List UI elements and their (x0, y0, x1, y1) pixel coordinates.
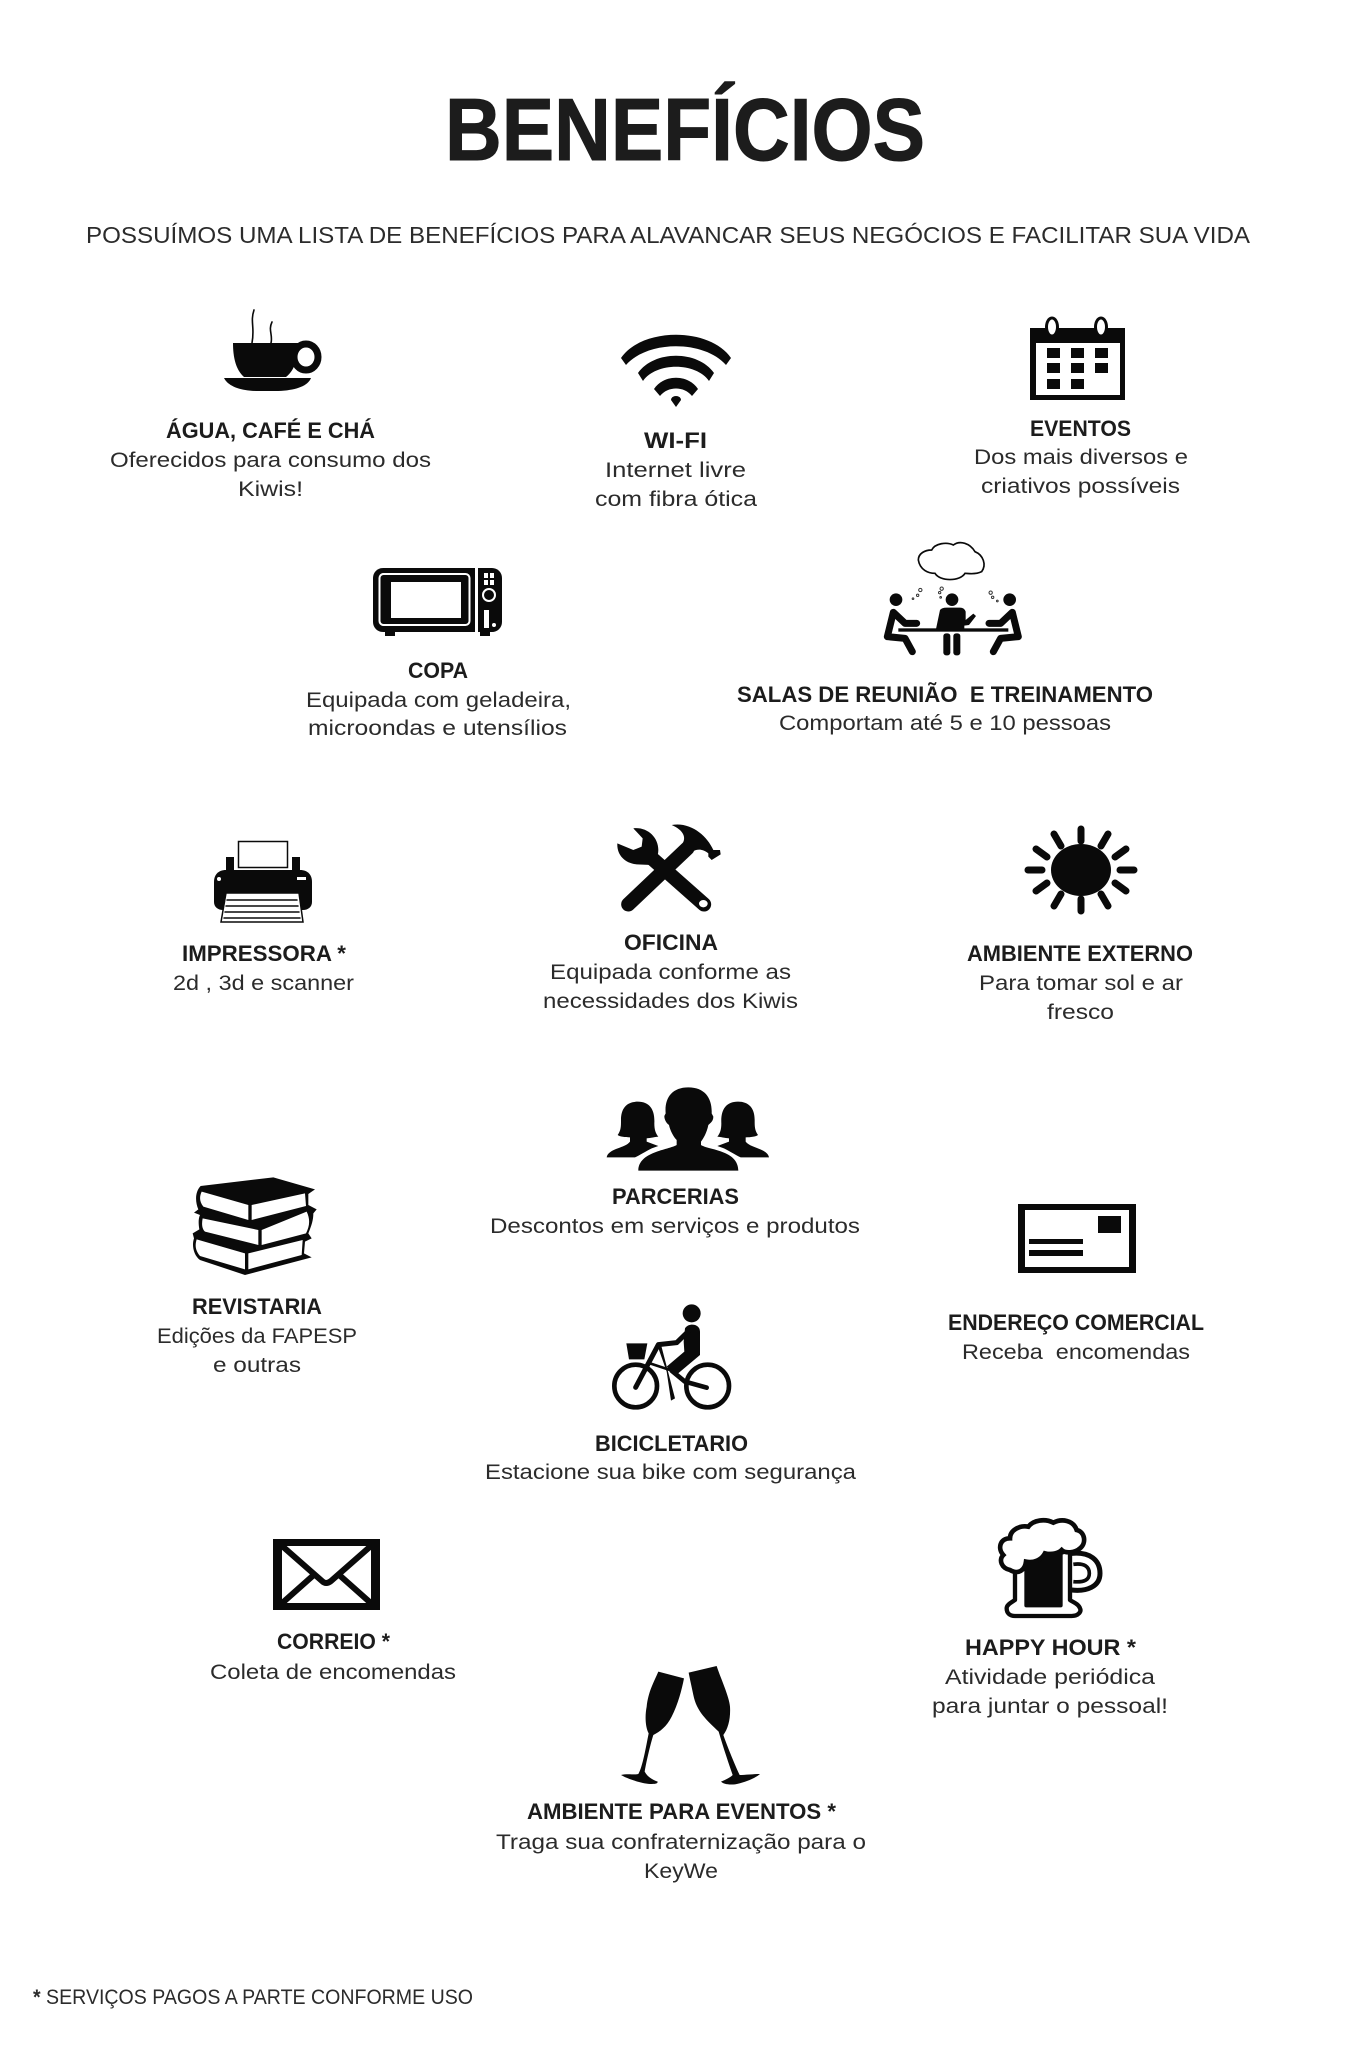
heading: HAPPY HOUR * (965, 1635, 1136, 1660)
description: Receba encomendas (962, 1340, 1190, 1364)
item: bicicletario (485, 1304, 856, 1484)
description line 1: Internet livre (605, 458, 746, 482)
icon: cyclist (614, 1304, 729, 1407)
item: ambiente externo (967, 829, 1193, 1024)
item: endereço comercial (948, 1204, 1204, 1364)
icon: beer mug (1000, 1520, 1100, 1616)
heading: REVISTARIA (192, 1294, 322, 1319)
description line 2: necessidades dos Kiwis (543, 989, 798, 1013)
description line 2: para juntar o pessoal! (932, 1694, 1168, 1718)
icon: books (193, 1177, 317, 1275)
description line 1: Atividade periódica (945, 1665, 1155, 1689)
description: Coleta de encomendas (210, 1660, 456, 1684)
icon: wifi (621, 335, 731, 407)
subtitle: POSSUÍMOS UMA LISTA DE BENEFÍCIOS PARA ALAVANCAR SEUS NEGÓCIOS E FACILITAR SUA VIDA (86, 222, 1250, 248)
item: correio (210, 1539, 456, 1684)
icon: coffee cup (224, 310, 318, 391)
description line 2: KeyWe (644, 1859, 718, 1883)
heading: BICICLETARIO (595, 1431, 748, 1456)
description line 2: Kiwis! (238, 477, 303, 501)
description: Descontos em serviços e produtos (490, 1214, 860, 1238)
description line 2: microondas e utensílios (308, 716, 567, 740)
icon: people (607, 1087, 769, 1171)
heading: OFICINA (624, 930, 718, 955)
heading: WI-FI (644, 428, 707, 453)
icon: microwave (373, 568, 502, 636)
item: parcerias (490, 1087, 860, 1238)
description line 1: Dos mais diversos e (974, 445, 1188, 469)
description: 2d , 3d e scanner (173, 971, 354, 995)
description line 2: e outras (213, 1353, 301, 1377)
footnote: * SERVIÇOS PAGOS A PARTE CONFORME USO (33, 1986, 473, 2009)
icon: meeting (887, 543, 1018, 655)
title: BENEFÍCIOS (445, 80, 925, 179)
description: Estacione sua bike com segurança (485, 1460, 856, 1484)
description line 2: com fibra ótica (595, 487, 757, 511)
item: impressora (173, 842, 354, 995)
item: copa (306, 568, 571, 740)
item: ambiente para eventos (496, 1666, 866, 1883)
item: wi-fi (595, 335, 757, 511)
description line 2: fresco (1047, 1000, 1114, 1024)
item: happy hour (932, 1520, 1168, 1718)
description line 1: Equipada conforme as (550, 960, 791, 984)
heading: AMBIENTE EXTERNO (967, 941, 1193, 966)
item: oficina (543, 824, 798, 1013)
icon: champagne glasses (621, 1666, 760, 1785)
heading: CORREIO * (277, 1629, 390, 1654)
description line 1: Traga sua confraternização para o (496, 1830, 866, 1854)
heading: AMBIENTE PARA EVENTOS * (527, 1799, 836, 1824)
icon: calendar (1030, 318, 1125, 400)
heading: ÁGUA, CAFÉ E CHÁ (166, 418, 375, 443)
item: revistaria (157, 1177, 357, 1377)
icon: sun (1028, 829, 1134, 911)
item: água, café e chá (110, 310, 431, 501)
icon: wrench and hammer (617, 824, 721, 907)
description line 1: Equipada com geladeira, (306, 688, 571, 712)
item: eventos (974, 318, 1188, 498)
description line 2: criativos possíveis (981, 474, 1180, 498)
heading: ENDEREÇO COMERCIAL (948, 1310, 1204, 1335)
heading: SALAS DE REUNIÃO E TREINAMENTO (737, 682, 1153, 707)
icon: printer (214, 842, 312, 922)
icon: postcard (1018, 1204, 1136, 1273)
description: Comportam até 5 e 10 pessoas (779, 711, 1111, 735)
heading: COPA (408, 658, 468, 683)
description line 1: Oferecidos para consumo dos (110, 448, 431, 472)
heading: PARCERIAS (612, 1184, 739, 1209)
heading: EVENTOS (1030, 416, 1131, 441)
heading: IMPRESSORA * (182, 941, 346, 966)
icon: envelope (273, 1539, 380, 1610)
description line 1: Para tomar sol e ar (979, 971, 1183, 995)
item: salas de reunião (737, 543, 1153, 735)
description line 1: Edições da FAPESP (157, 1324, 357, 1348)
